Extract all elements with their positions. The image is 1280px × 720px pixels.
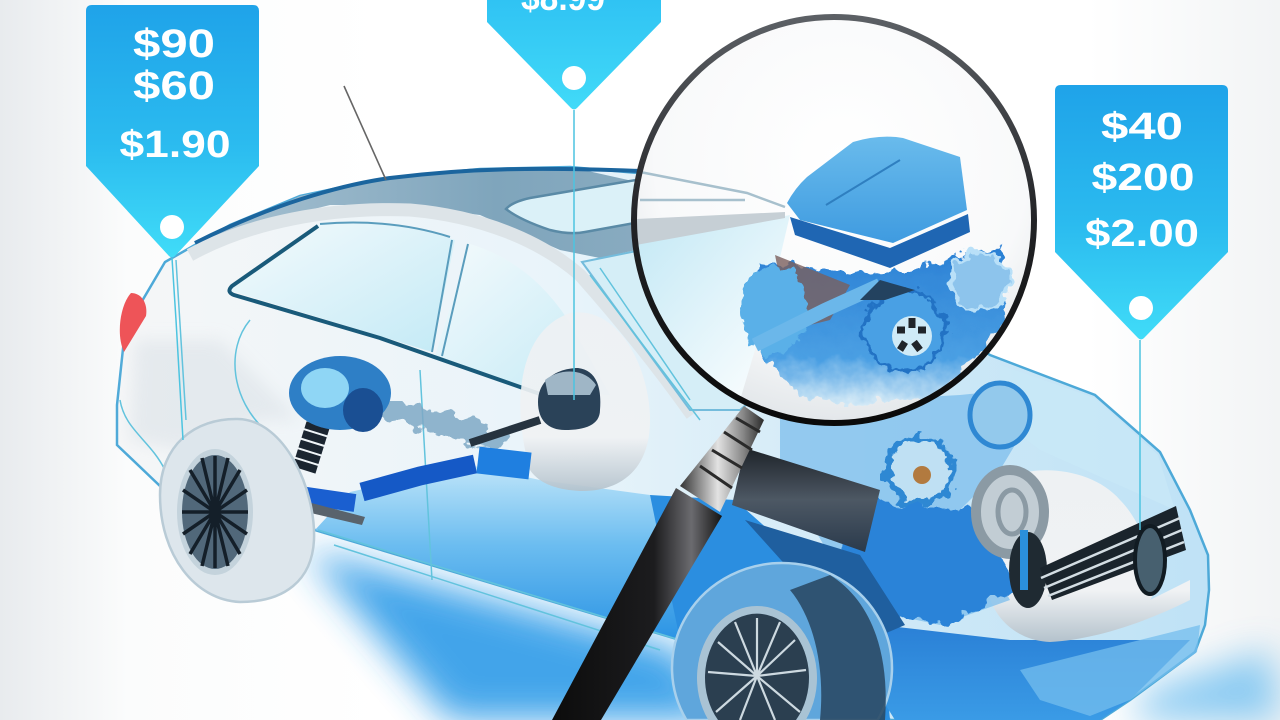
price tag: left bbox=[86, 5, 259, 440]
door lower blue bbox=[315, 465, 690, 642]
price: $90: $90 bbox=[133, 22, 215, 66]
front fender blue bbox=[650, 495, 890, 720]
side window rear bbox=[228, 223, 455, 352]
drivetrain bbox=[263, 356, 600, 525]
price tag: right bbox=[1055, 85, 1228, 530]
white wheel dome bbox=[520, 312, 650, 491]
antenna bbox=[344, 86, 386, 180]
price tag: centre bbox=[487, 0, 661, 400]
roof panel bbox=[200, 167, 790, 258]
engine bay bbox=[732, 383, 1047, 640]
side window front bbox=[435, 244, 610, 395]
price: $40: $40 bbox=[1101, 106, 1183, 148]
front lower body bbox=[870, 625, 1190, 720]
tail light bbox=[120, 293, 146, 352]
magnifier handle bbox=[552, 406, 764, 720]
sunroof bbox=[506, 176, 785, 233]
roof top edge bbox=[195, 169, 640, 243]
floor shadow: front bbox=[1130, 650, 1280, 720]
magnified car and engine bbox=[632, 137, 1010, 405]
floor shadow: rear bbox=[305, 550, 720, 720]
price: $1.90: $1.90 bbox=[120, 124, 230, 166]
white headlight dome bbox=[985, 470, 1190, 642]
body lines bbox=[120, 260, 700, 650]
rear quarter shading bbox=[130, 340, 300, 450]
price: $200: $200 bbox=[1092, 157, 1194, 199]
front bumper strip bbox=[1020, 625, 1200, 716]
lens bbox=[634, 17, 1034, 423]
rear wheel bbox=[160, 419, 314, 602]
car illustration bbox=[117, 86, 1209, 720]
price: $60: $60 bbox=[133, 64, 215, 108]
magnifying glass bbox=[552, 17, 1034, 720]
front grille bbox=[1040, 506, 1186, 600]
window frame bbox=[320, 223, 468, 356]
lens rim bbox=[634, 17, 1034, 423]
silver pillar band bbox=[190, 210, 692, 415]
window sill bbox=[229, 226, 540, 394]
price: $2.00: $2.00 bbox=[1085, 213, 1199, 255]
car body bbox=[117, 167, 1209, 720]
hood tint bbox=[1000, 365, 1175, 510]
front wheel bbox=[672, 563, 892, 720]
windshield bbox=[582, 218, 870, 410]
